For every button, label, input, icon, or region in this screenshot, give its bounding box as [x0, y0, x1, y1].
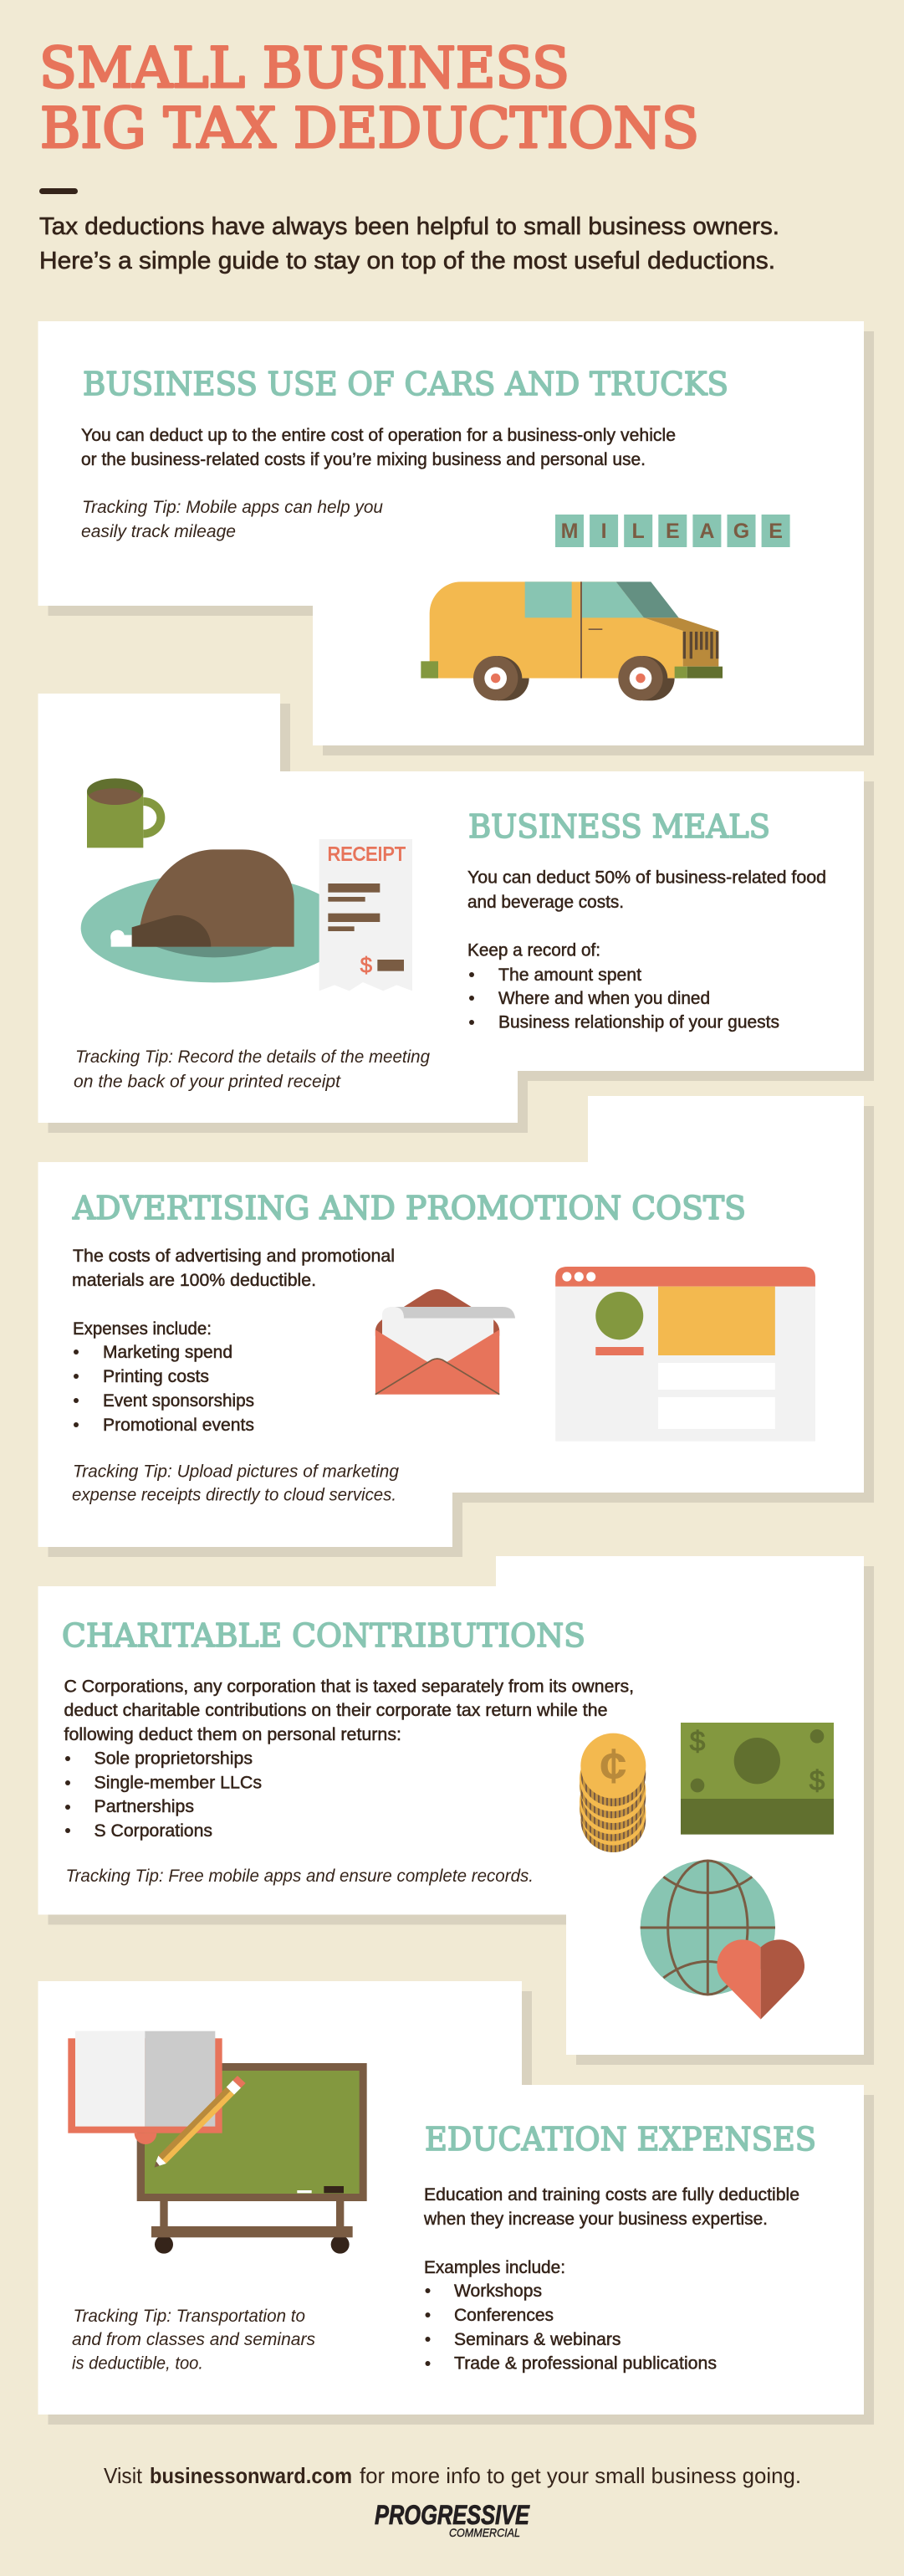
description: and beverage costs. [467, 893, 624, 912]
footer call to action: Visit [104, 2463, 143, 2488]
heading: charitable: CHARITABLE CONTRIBUTIONS [62, 1617, 585, 1655]
icon: chalkboard [137, 2063, 367, 2254]
icon: globe [641, 1860, 775, 1995]
heading: education: EDUCATION EXPENSES [425, 2121, 816, 2159]
title: BIG TAX DEDUCTIONS [40, 96, 699, 161]
examples list: Examples include: [424, 2258, 565, 2277]
tracking tip [74, 1047, 430, 1091]
footer call to action: businessonward.com [150, 2463, 352, 2488]
title: SMALL BUSINESS [39, 36, 569, 100]
icon: pencil [155, 2076, 246, 2168]
icon: mileage tiles [555, 515, 790, 547]
examples list: Workshops [454, 2282, 542, 2301]
description [81, 426, 676, 469]
icon: mileage tiles: I [601, 520, 607, 543]
description: following deduct them on personal returns: [64, 1725, 401, 1744]
description: The costs of advertising and promotional [73, 1247, 395, 1266]
description: C Corporations, any corporation that is taxed separately from its owners, [64, 1677, 634, 1697]
logo: Progressive Commercial: PROGRESSIVE [375, 2500, 530, 2530]
icon: mileage tiles: G [733, 520, 749, 543]
record list: Where and when you dined [498, 989, 710, 1008]
icon: receipt: $ [360, 952, 373, 977]
expense list [73, 1319, 254, 1435]
entity list: Single-member LLCs [94, 1774, 262, 1792]
description [467, 868, 826, 912]
tracking tip: easily track mileage [81, 522, 236, 541]
examples list: Seminars & webinars [454, 2330, 621, 2349]
tracking tip: Tracking Tip: Transportation to [74, 2307, 305, 2326]
icon: mileage tiles: E [666, 520, 680, 543]
record list: The amount spent [498, 965, 641, 985]
entity list: Sole proprietorships [94, 1749, 253, 1769]
examples list [424, 2258, 717, 2373]
entity list [65, 1749, 262, 1841]
icon: turkey on plate [81, 849, 349, 982]
tracking tip: on the back of your printed receipt [74, 1073, 341, 1091]
description: deduct charitable contributions on their corporate tax return while the [64, 1701, 607, 1720]
title [39, 36, 699, 161]
footer call to action [104, 2463, 801, 2488]
icon: mileage tiles: L [632, 520, 645, 543]
panel: advertising and promotion costs [38, 1096, 874, 1557]
intro text: Here’s a simple guide to stay on top of the most useful deductions. [39, 248, 775, 274]
tracking tip [72, 1462, 399, 1504]
record list: Business relationship of your guests [498, 1012, 779, 1032]
description [72, 1247, 395, 1290]
expense list: Expenses include: [73, 1319, 212, 1339]
icon: dollar bill: $ [690, 1726, 705, 1757]
tracking tip: Tracking Tip: Record the details of the meeting [75, 1047, 430, 1067]
description: materials are 100% deductible. [72, 1271, 316, 1290]
icon: dollar bill: $ [810, 1765, 825, 1796]
tracking tip: expense receipts directly to cloud services. [72, 1486, 396, 1504]
description: You can deduct 50% of business-related food [467, 868, 826, 887]
intro text: Tax deductions have always been helpful to small business owners. [39, 213, 779, 240]
expense list: Promotional events [103, 1416, 254, 1435]
description: You can deduct up to the entire cost of operation for a business-only vehicle [81, 426, 676, 445]
icon: mileage tiles: A [699, 520, 714, 543]
icon: heart [717, 1939, 804, 2020]
panel: business use of cars and trucks [38, 321, 874, 755]
icon: receipt: RECEIPT [328, 842, 406, 864]
tracking tip: Tracking Tip: Mobile apps can help you [82, 498, 383, 517]
panel: charitable contributions [38, 1556, 874, 2065]
heading: cars and trucks: BUSINESS USE OF CARS AND TRUCKS [83, 366, 728, 403]
logo: Progressive Commercial: COMMERCIAL [449, 2526, 520, 2539]
tracking tip [72, 2307, 315, 2373]
footer call to action: for more info to get your small business going. [360, 2463, 801, 2488]
description [423, 2185, 799, 2229]
entity list: Partnerships [94, 1797, 194, 1816]
tracking tip: is deductible, too. [72, 2354, 203, 2373]
heading: advertising: ADVERTISING AND PROMOTION COSTS [72, 1190, 746, 1227]
icon: open book [68, 2031, 222, 2144]
expense list: Event sponsorships [103, 1391, 254, 1411]
description [64, 1677, 634, 1744]
examples list: Conferences [454, 2306, 554, 2325]
title rule [39, 188, 78, 194]
tracking tip: Tracking Tip: Free mobile apps and ensure complete records. [65, 1867, 534, 1886]
logo: Progressive Commercial [375, 2500, 530, 2539]
expense list: Marketing spend [103, 1343, 232, 1362]
examples list: Trade & professional publications [454, 2354, 717, 2373]
icon: coin stack [580, 1734, 646, 1852]
icon: envelope [375, 1289, 515, 1395]
description: or the business-related costs if you’re mixing business and personal use. [81, 450, 646, 469]
icon: dollar bill [681, 1723, 834, 1835]
icon: coin stack: ¢ [600, 1739, 627, 1794]
panel: education expenses [38, 1981, 874, 2425]
icon: receipt [319, 839, 412, 991]
icon: browser window [555, 1267, 815, 1442]
icon: mileage tiles: M [561, 520, 578, 543]
icon: mileage tiles: E [769, 520, 783, 543]
record list [467, 940, 779, 1032]
entity list: S Corporations [94, 1821, 212, 1841]
record list: Keep a record of: [467, 940, 600, 960]
expense list: Printing costs [103, 1367, 209, 1386]
tracking tip: Tracking Tip: Upload pictures of marketing [73, 1462, 399, 1481]
heading: business meals: BUSINESS MEALS [468, 808, 770, 846]
description: Education and training costs are fully deductible [424, 2185, 799, 2205]
intro text [39, 213, 779, 274]
icon: van [421, 581, 723, 700]
icon: mug [87, 778, 165, 848]
tracking tip: and from classes and seminars [72, 2330, 315, 2349]
description: when they increase your business expertise. [423, 2210, 768, 2229]
panel: business meals [38, 694, 874, 1133]
tracking tip [81, 498, 383, 541]
